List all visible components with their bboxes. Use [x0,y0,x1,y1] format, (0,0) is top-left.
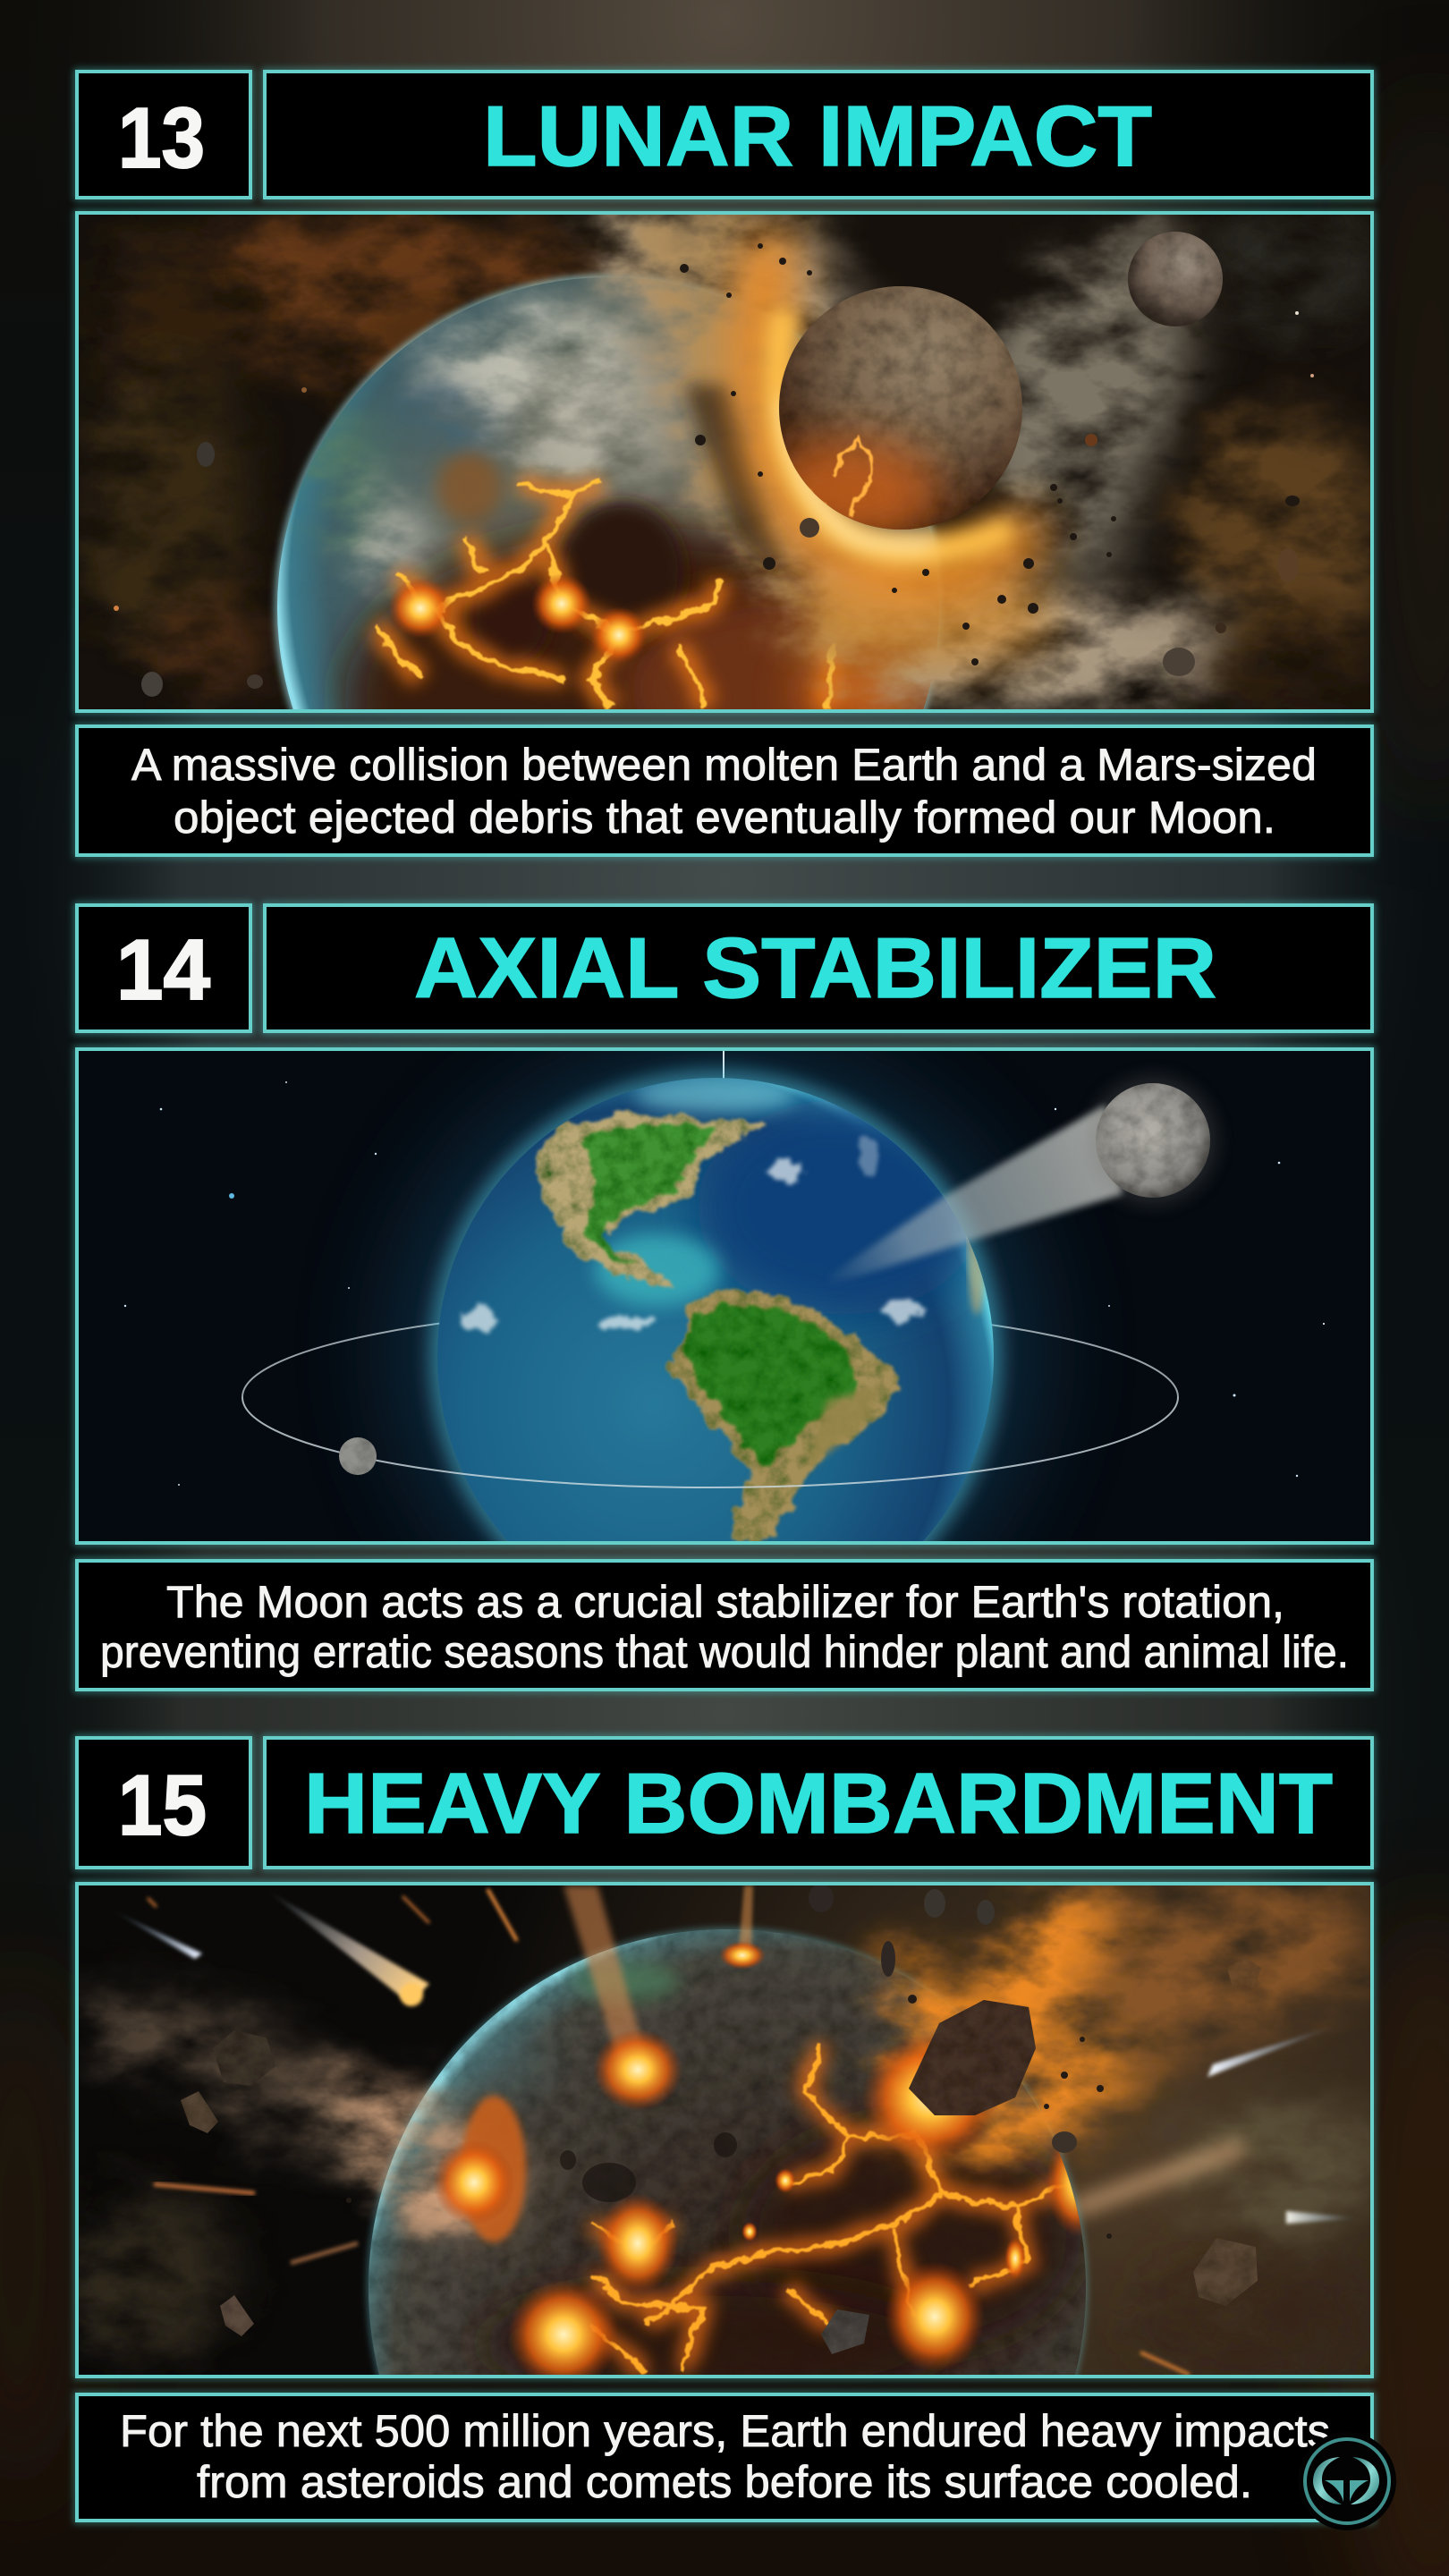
number box 14: 14 [116,922,210,1018]
impact flash [759,259,1020,576]
comets and streaks [111,1889,1360,2375]
title box: lunar impact: LUNAR IMPACT [483,89,1152,184]
large Moon [1089,1076,1217,1205]
small distant moon [1128,232,1223,326]
number box 14 [77,905,250,1031]
molten crust [313,497,928,709]
section 13: lunar impact [77,72,1395,942]
caption box 15 [77,2394,1372,2521]
caption box 14: The Moon acts as a crucial stabilizer for Earth's rotation, [166,1577,1284,1627]
title box: axial stabilizer: AXIAL STABILIZER [414,920,1216,1016]
title box: heavy bombardment: HEAVY BOMBARDMENT [304,1756,1333,1852]
illustration panel: asteroids striking Earth [63,1884,1395,2576]
Earth globe [269,270,943,709]
cratered planet [367,1928,1110,2576]
caption box 15: from asteroids and comets before its surface cooled. [197,2457,1252,2507]
title box: heavy bombardment [265,1738,1372,1868]
number box 15 [77,1738,250,1868]
orbit ring, back half [242,1307,1178,1397]
section 14: axial stabilizer [77,905,1372,1690]
lava cracks [590,2046,1072,2372]
asteroids [181,1884,1261,2354]
title box: axial stabilizer [265,905,1372,1031]
smoke clouds [63,1885,1395,2388]
icon: round teal logo badge [1298,2432,1396,2530]
craters [560,2132,737,2202]
caption box 14: preventing erratic seasons that would hinder plant and animal life. [100,1627,1349,1677]
rock debris [114,243,1314,697]
nebula clouds [89,206,1395,724]
ejecta smoke plume [586,215,1225,709]
South America [670,1289,901,1540]
title box: lunar impact [265,72,1372,198]
section 15: heavy bombardment [63,1738,1395,2576]
lava cracks [376,479,832,708]
stars [124,1081,1325,1486]
top strike [564,1885,766,2111]
axis line [723,1051,724,1080]
illustration panel: molten Earth struck by a Mars-sized body [70,206,1379,719]
caption box 13: object ejected debris that eventually formed our Moon. [174,792,1275,843]
number box 13: 13 [118,90,205,186]
orbit ring, front half [242,1397,1178,1487]
Moon gravity beam [805,1105,1123,1292]
big asteroid strike [862,1887,1163,2162]
number box 15: 15 [118,1758,207,1853]
caption box 14 [77,1561,1372,1690]
impactor body [760,286,1022,546]
illustration panel: Earth with stabilizing Moon [77,1038,1372,1664]
Earth globe [429,1070,1002,1642]
caption box 13: A massive collision between molten Earth and a Mars-sized [131,740,1317,790]
caption box 13 [77,726,1372,855]
North America [536,1112,767,1288]
number box 13 [77,72,250,198]
small Moon on orbit [339,1437,377,1475]
left strike with plume [322,2075,528,2245]
clouds [459,1134,925,1331]
caption box 15: For the next 500 million years, Earth endured heavy impacts [120,2406,1330,2456]
